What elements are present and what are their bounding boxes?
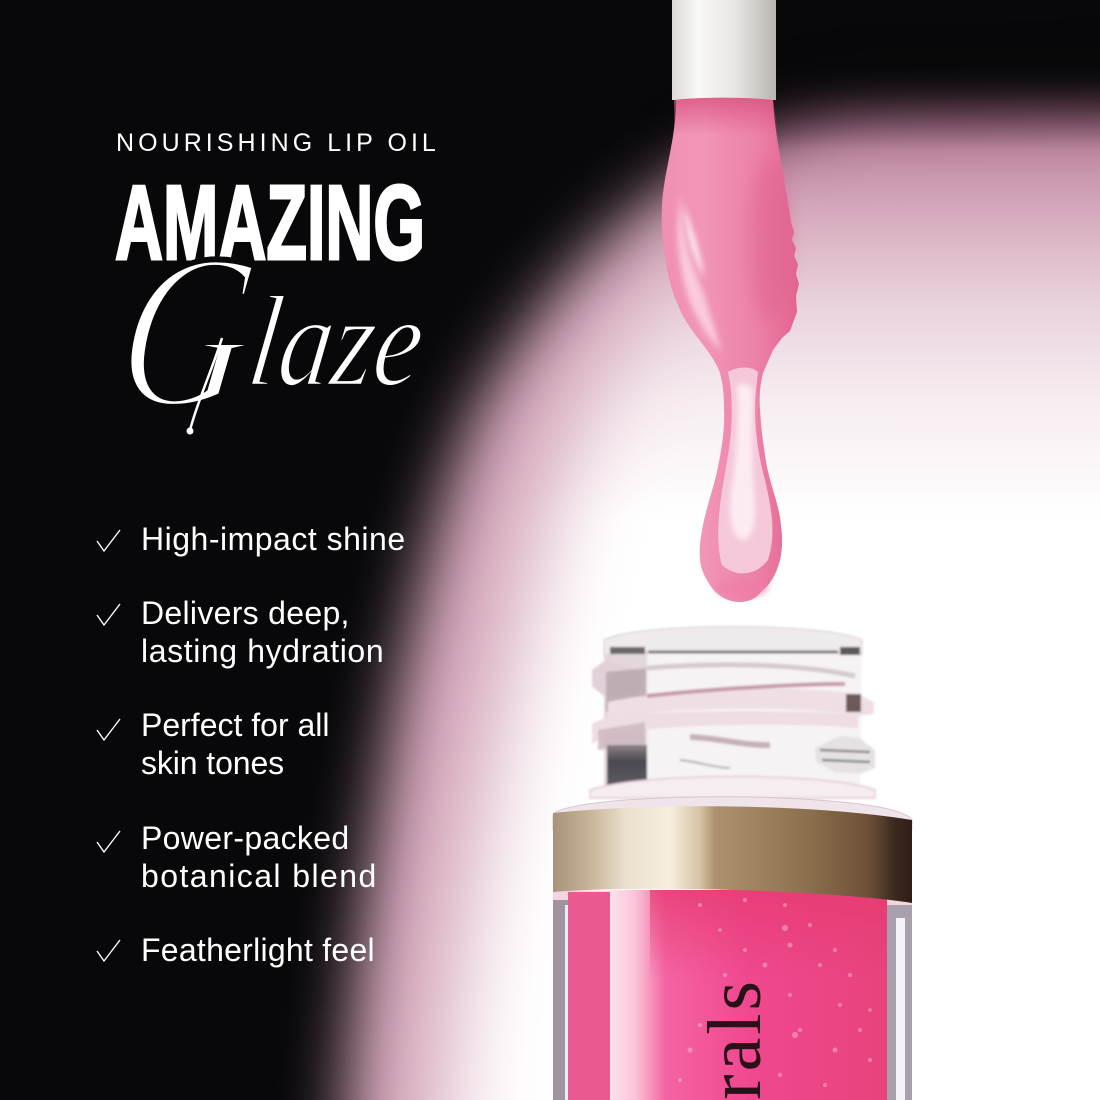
benefit: botanical: botanical blend: [141, 858, 378, 894]
bottle brand text: rals: [693, 978, 777, 1100]
benefit: botanical: [141, 820, 378, 894]
product photo: glow, dropper, oil drop and bottle: [295, 0, 1100, 1100]
shoulder: [553, 797, 912, 830]
script heading: G: [105, 209, 270, 453]
check icon: [96, 718, 120, 742]
benefit: hydration: [141, 595, 384, 669]
dropper wand: [672, 0, 776, 100]
eyebrow heading: NOURISHING LIP OIL: [116, 129, 440, 157]
benefit: hydration: lasting hydration: [141, 633, 384, 669]
clear thread knob: [815, 736, 875, 774]
check icon: [96, 830, 120, 854]
oil on applicator: [662, 98, 799, 602]
benefit: feel: Featherlight feel: [141, 932, 375, 968]
check icon: [96, 604, 120, 626]
benefit: skin tones: skin tones: [141, 745, 284, 781]
benefit: botanical: Power-packed: [141, 820, 350, 856]
benefit: skin tones: [141, 707, 330, 781]
background glow: [295, 78, 1100, 1100]
check icon: [96, 940, 120, 962]
benefits list: [96, 521, 406, 968]
bubbles: [678, 898, 872, 1087]
gold collar: [553, 806, 912, 903]
pink product window: [553, 890, 912, 1100]
main heading: AMAZING: [115, 164, 425, 282]
script heading: laze: [241, 269, 433, 413]
benefit: hydration: Delivers deep,: [141, 595, 350, 631]
bottle neck glass: [590, 626, 875, 798]
benefit: skin tones: Perfect for all: [141, 707, 330, 743]
check icon: [96, 530, 120, 552]
benefit: shine: High-impact shine: [141, 521, 406, 557]
bottle body: [553, 797, 912, 1100]
